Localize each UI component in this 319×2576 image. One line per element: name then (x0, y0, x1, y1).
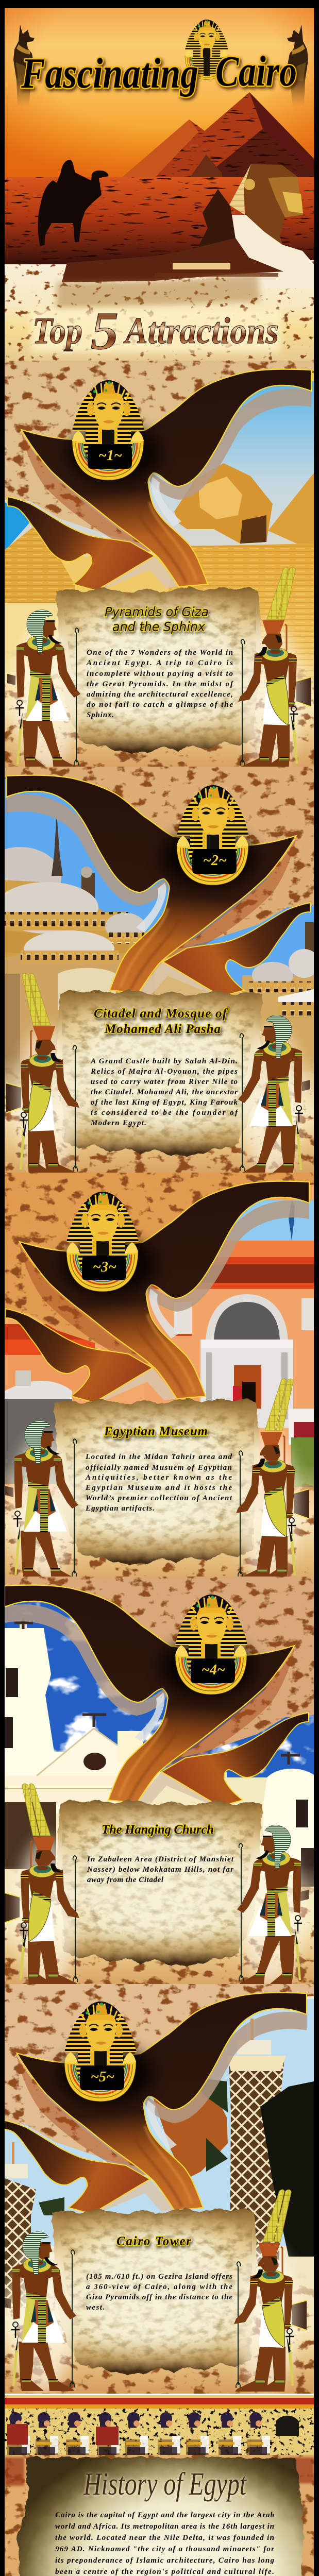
text: attraction 2 description: is considered to be the founder of (91, 1109, 239, 1117)
text: history description (55, 2511, 274, 2576)
text: history description: the world. Located near the Nile Delta, it was founded in (55, 2534, 274, 2542)
text: attraction 1 description: One of the 7 Wonders of the World in (87, 649, 233, 657)
text: attraction 5 description (86, 2273, 232, 2312)
panel: attraction 5 Cairo Tower (0, 1984, 319, 2396)
panel: attraction 1 Pyramids of Giza (0, 361, 319, 773)
scene: museum photo (5, 1180, 314, 1592)
scene: pyramids and sphinx photo (5, 371, 314, 773)
shadow behind mask (62, 1235, 157, 1295)
icon: pharaoh mask number 1 (72, 380, 144, 480)
lower fade to papyrus (5, 1056, 314, 1180)
heading: Citadel and Mosque (94, 1007, 228, 1036)
scene: Cairo Tower photo (5, 1994, 314, 2396)
lower cream rock with stains (5, 260, 314, 371)
flowing swoosh (5, 1585, 309, 1923)
text: history description: world and Africa. Its metropolitan area is the 16th largest in (55, 2522, 274, 2531)
text: attraction 1 description: Sphinx. (87, 711, 114, 719)
text: attraction 2 description: used to carry water from River Nile to (91, 1078, 238, 1086)
text: attraction 3 description: World’s premier collection of Ancient (86, 1494, 232, 1502)
parchment scroll (57, 1799, 262, 1966)
flowing swoosh (3, 1993, 307, 2330)
text: attraction 3 description: officially named Musuem of Egyptian (86, 1464, 232, 1472)
heading: Top 5 Attractions: Attractions (123, 310, 279, 351)
heading: Citadel and Mosque: Citadel and Mosque of (94, 1007, 228, 1021)
text: attraction 2 description: A Grand Castle built by Salah Al-Din. (90, 1057, 238, 1065)
heading: The Hanging Church: The Hanging Church (102, 1823, 214, 1837)
lower fade to papyrus (5, 649, 314, 773)
title: Fascinating (21, 49, 198, 97)
icon: sphinx (57, 164, 314, 309)
flowing swoosh (5, 1181, 309, 1519)
side walls with red stains (5, 2455, 314, 2576)
heading: Citadel and Mosque: Mohamed Ali Pasha (104, 1022, 221, 1036)
text: history description: Cairo is the capital of Egypt and the largest city in the Arab (55, 2511, 274, 2519)
heading: Egyptian Museum: Egyptian Museum (104, 1425, 208, 1438)
text: attraction 1 description: the Great Pyramids. In the midst of (87, 680, 234, 688)
text: attraction 4 description: In Zabaleen Area (District of Manshiet (87, 1855, 234, 1863)
text: history description: been a centre of the region's political and cultural life. (55, 2568, 274, 2576)
figure: pharaoh with plumed crown (234, 2190, 297, 2393)
glow behind heading (31, 309, 281, 353)
papyrus wall background (0, 1173, 319, 1358)
decorative red and gold band (5, 2395, 314, 2409)
text: attraction 2 description: the Citadel. Mohamed Ali, the ancestor (91, 1088, 238, 1096)
text: attraction 4 description (87, 1855, 234, 1884)
text: attraction 5 description: a 360-view of Cairo, along with the (86, 2283, 232, 2291)
flowing swoosh (6, 775, 310, 1113)
icon: camel and rider silhouette (38, 160, 108, 246)
scene: mosque photo (0, 773, 319, 1185)
heading: Pyramids of Giza: Pyramids of Giza (105, 604, 209, 619)
papyrus wall background (0, 361, 319, 546)
papyrus wall background (0, 1577, 319, 1762)
text: attraction 2 description: Relics of Majra Al-Oyouon, the pipes (90, 1067, 238, 1076)
text: attraction 1 description: Ancient Egypt. A trip to Cairo is (86, 659, 233, 667)
text: attraction 1 description (86, 649, 234, 719)
text: attraction 4 description: Nasser) below Mokkatam Hills, not far (87, 1866, 233, 1874)
text: attraction 5 description: (185 m./610 ft.) on Gezira Island offers (86, 2273, 232, 2281)
text: history description: its preponderance of Islamic architecture, Cairo has long (55, 2556, 274, 2565)
text: attraction 1 description: incomplete without paying a visit to (87, 670, 233, 678)
figure: pharaoh with nemes (10, 2232, 76, 2393)
parchment scroll (54, 1398, 259, 1565)
text: attraction 3 description: Antiquities, better known as the (85, 1473, 232, 1482)
heading: Pyramids of Giza: and the Sphinx (112, 619, 205, 634)
text: attraction 4 description: away from the Citadel (87, 1876, 164, 1884)
heading: History of Egypt: History of Egypt (83, 2467, 247, 2502)
icon: pharaoh mask number 3 (66, 1192, 139, 1292)
figure: pharaoh with plumed crown (16, 973, 79, 1176)
shadow behind mask (59, 2045, 154, 2105)
text: attraction 5 description: Giza Pyramids off in the distance to the (86, 2293, 232, 2301)
icon: Anubis statue right (287, 25, 308, 106)
heading: Top 5 Attractions (32, 301, 279, 361)
icon: pyramids of Giza silhouette (122, 92, 314, 258)
text: attraction 2 description: of the last King of Egypt, King Farouk (91, 1098, 238, 1107)
lower fade to papyrus (5, 1865, 314, 1994)
figure: pharaoh with plumed crown (236, 1379, 299, 1582)
icon: pharaoh mask number 5 (64, 2002, 137, 2102)
figure: pharaoh with nemes (237, 1825, 303, 1987)
figure: pharaoh with plumed crown (16, 1784, 79, 1987)
heading: Pyramids of Giza (105, 604, 209, 634)
icon: pharaoh mask number 3: ~3~ (93, 1259, 116, 1275)
icon: pharaoh mask number 2 (177, 785, 249, 885)
icon: pharaoh mask in title (185, 20, 228, 79)
panel: hero with pyramids and sphinx (5, 8, 314, 371)
flowing swoosh (7, 369, 311, 707)
heading: Cairo Tower: Cairo Tower (116, 2234, 191, 2248)
icon: pharaoh mask number 5: ~5~ (91, 2069, 114, 2085)
panel: attraction 2 Citadel and Mosque (0, 767, 319, 1185)
shadow behind mask (161, 828, 256, 888)
icon: pharaoh mask number 4 (175, 1595, 247, 1694)
papyrus wall background (0, 1984, 319, 2170)
text: attraction 3 description: Egyptian artifacts. (85, 1504, 155, 1513)
lower fade to papyrus (5, 1463, 314, 1592)
parchment scroll (57, 989, 262, 1156)
text: attraction 2 description (90, 1057, 239, 1127)
icon: Anubis statue left (13, 25, 35, 106)
parchment scroll (52, 2208, 257, 2375)
text: attraction 1 description: do not fail to catch a glimpse of the (87, 701, 233, 709)
figure: pharaoh with nemes (12, 1421, 78, 1582)
parchment scroll (56, 586, 261, 753)
icon: pharaoh mask number 4: ~4~ (202, 1662, 225, 1678)
panel: attraction 4 The Hanging Church (0, 1577, 319, 1994)
figure: pharaoh with plumed crown (238, 567, 301, 770)
wall art: seated figures (5, 2409, 314, 2460)
text: attraction 5 description: west. (86, 2303, 105, 2312)
text: attraction 2 description: Modern Egypt. (90, 1119, 146, 1127)
scene: church photo (5, 1587, 314, 1994)
icon: pharaoh mask number 1: ~1~ (98, 448, 122, 464)
text: history description: 969 AD. Nicknamed "the city of a thousand minarets" for (55, 2545, 274, 2553)
text: attraction 3 description: Located in the Midan Tahrir area and (85, 1453, 232, 1461)
title: Cairo (215, 47, 297, 95)
text: attraction 3 description: Egyptian Museum and it hosts the (85, 1484, 232, 1492)
parchment scroll: history (18, 2458, 304, 2576)
icon: pharaoh mask number 2: ~2~ (203, 853, 227, 869)
desert ground (5, 177, 314, 265)
text: attraction 3 description (85, 1453, 232, 1513)
lower fade to papyrus (5, 2272, 314, 2395)
text: attraction 1 description: admiring the architectural excellence, (87, 690, 233, 699)
shadow behind mask (68, 423, 161, 483)
heading: Top 5 Attractions: 5 (91, 301, 119, 361)
figure: pharaoh with nemes (14, 610, 80, 771)
heading: Top 5 Attractions: Top (32, 310, 82, 351)
panel: attraction 3 Egyptian Museum (0, 1173, 319, 1592)
panel: history of Egypt (5, 2394, 314, 2576)
shadow behind mask (160, 1637, 255, 1697)
papyrus wall background (0, 767, 319, 952)
figure: pharaoh with nemes (238, 1015, 304, 1177)
